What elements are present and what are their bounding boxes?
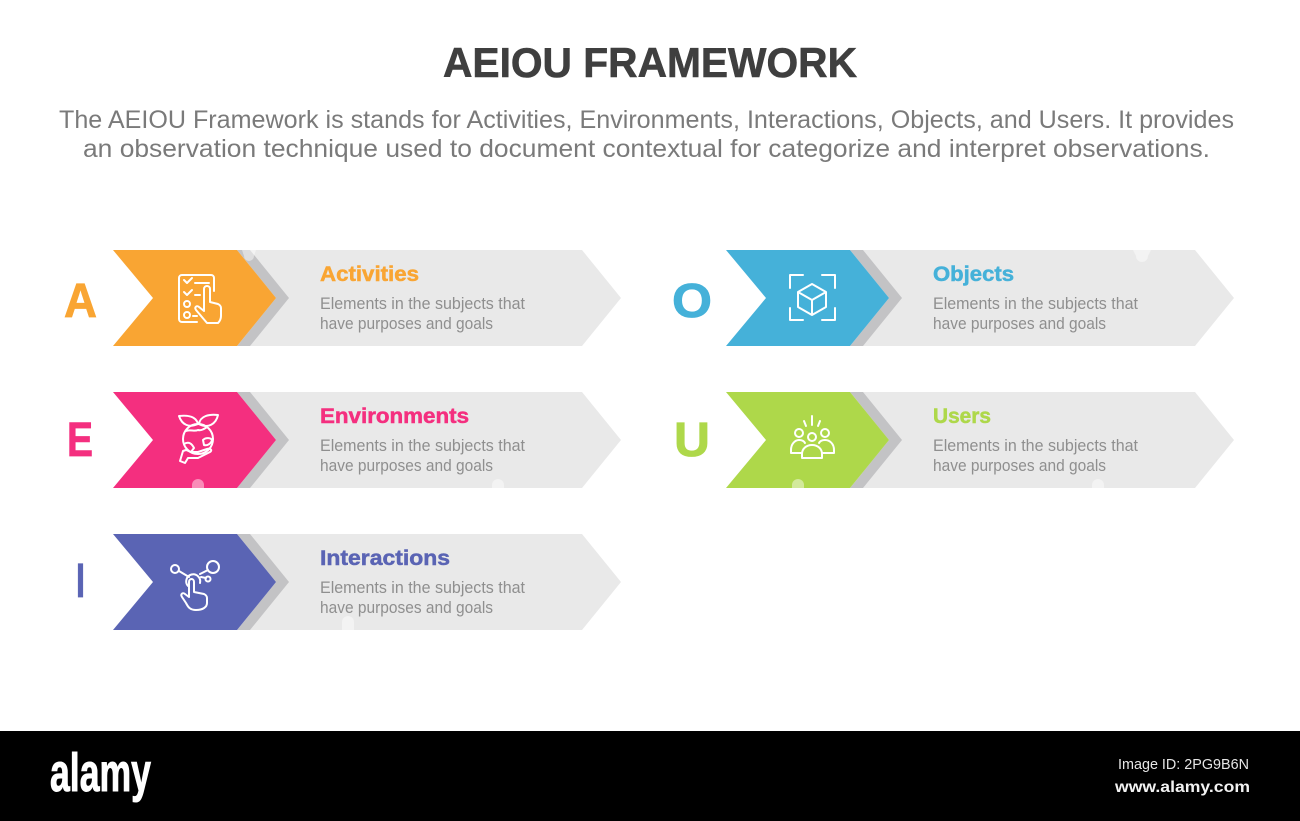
chevron shadow (850, 250, 902, 346)
intro paragraph: an observation technique used to document contextual for categorize and interpret observations. (83, 135, 1210, 163)
green chevron (726, 392, 889, 488)
letter O: O (672, 275, 712, 328)
chevron shadow (850, 392, 902, 488)
image ID: Image ID: 2PG9B6N (1118, 756, 1249, 773)
description: have purposes and goals (320, 457, 493, 475)
panel: Environments (67, 392, 621, 488)
description: Elements in the subjects that (933, 437, 1138, 455)
description: have purposes and goals (320, 599, 493, 617)
title: AEIOU FRAMEWORK (443, 39, 857, 86)
description (320, 437, 525, 475)
panel: Objects (672, 250, 1234, 346)
description (320, 579, 525, 617)
blue chevron (726, 250, 889, 346)
indigo chevron (113, 534, 276, 630)
intro paragraph: The AEIOU Framework is stands for Activities, Environments, Interactions, Objects, and Users. It provides (59, 106, 1234, 134)
panel: Users (674, 392, 1234, 488)
description: Elements in the subjects that (320, 579, 525, 597)
panel: Activities (64, 250, 621, 346)
website: www.alamy.com (1114, 779, 1250, 796)
chevron shadow (237, 534, 289, 630)
letter A: A (64, 275, 97, 328)
heading: Activities: Activities (320, 263, 419, 286)
description: Elements in the subjects that (320, 295, 525, 313)
pink chevron (113, 392, 276, 488)
letter U: U (674, 414, 710, 467)
intro paragraph (59, 106, 1234, 163)
gray arrow body (863, 392, 1234, 488)
letter I: I (76, 555, 85, 608)
heading: Users: Users (933, 405, 991, 428)
gray arrow body (250, 534, 621, 630)
icon: globe with leaves in hand (179, 415, 218, 463)
icon: network with pointing hand (171, 561, 219, 610)
description: have purposes and goals (933, 457, 1106, 475)
icon: cube in frame (790, 275, 835, 320)
chevron shadow (237, 392, 289, 488)
panel: Interactions (76, 534, 621, 630)
chevron shadow (237, 250, 289, 346)
gray arrow body (250, 250, 621, 346)
description: have purposes and goals (933, 315, 1106, 333)
description (933, 437, 1138, 475)
alamy logo: alamy (50, 743, 151, 803)
heading: Objects: Objects (933, 263, 1014, 286)
description: Elements in the subjects that (933, 295, 1138, 313)
icon: checklist with hand (179, 275, 221, 323)
heading: Interactions: Interactions (320, 547, 450, 570)
gray arrow body (863, 250, 1234, 346)
gray arrow body (250, 392, 621, 488)
icon: group of people (791, 416, 834, 458)
description: Elements in the subjects that (320, 437, 525, 455)
orange chevron (113, 250, 276, 346)
footer bar (0, 731, 1300, 821)
letter E: E (67, 414, 93, 467)
description (320, 295, 525, 333)
description: have purposes and goals (320, 315, 493, 333)
description (933, 295, 1138, 333)
heading: Environments: Environments (320, 405, 469, 428)
